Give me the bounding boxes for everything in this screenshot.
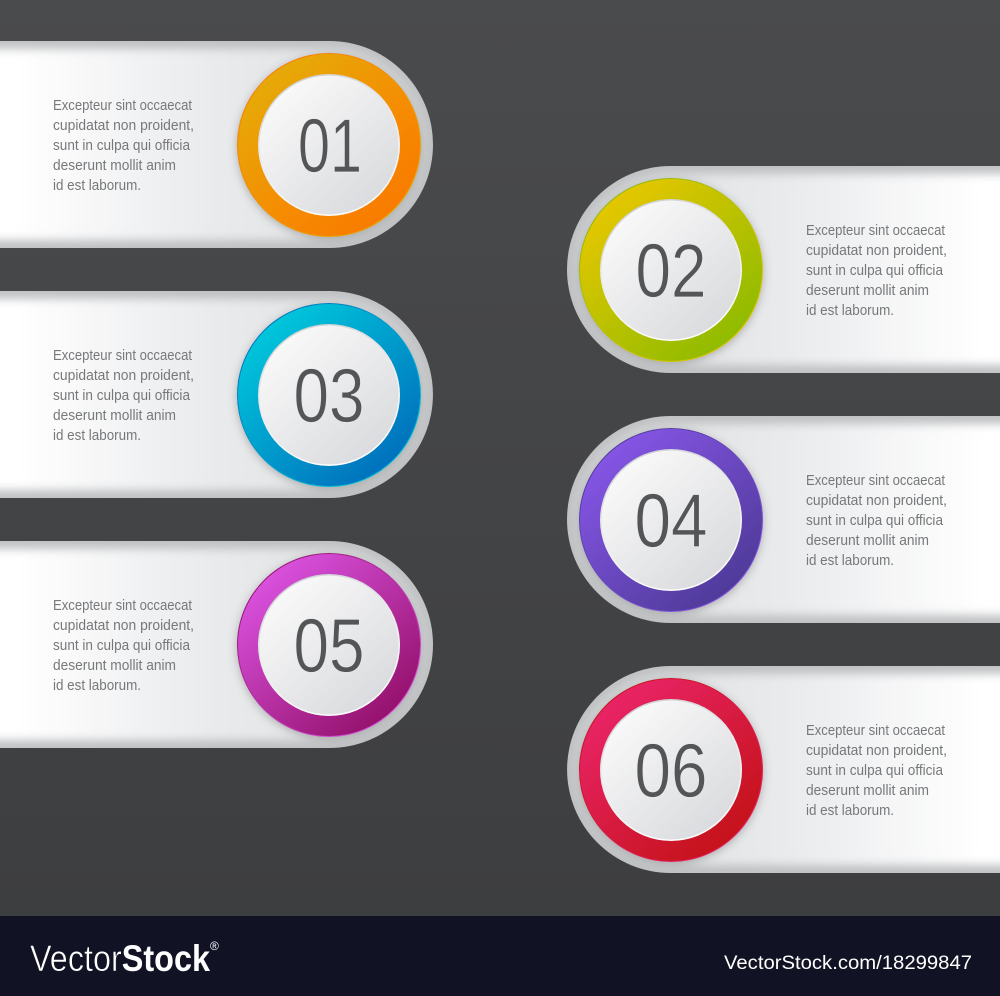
text block 03: deserunt mollit anim [53,407,176,424]
text block 05: sunt in culpa qui officia [53,637,191,654]
text block 06 [806,722,947,819]
text block 02: cupidatat non proident, [806,242,947,259]
text block 05: Excepteur sint occaecat [53,597,193,614]
badge 02 [579,178,763,362]
panel: step 05 [0,541,433,748]
text block 03: id est laborum. [53,427,141,444]
text block 02: sunt in culpa qui officia [806,262,944,279]
text block 04: cupidatat non proident, [806,492,947,509]
text block 01: deserunt mollit anim [53,157,176,174]
text block 03: cupidatat non proident, [53,367,194,384]
text block 04 [806,472,947,569]
text block 01: cupidatat non proident, [53,117,194,134]
panel: step 03 [0,291,433,498]
badge 02: 02 [636,229,706,314]
text block 06: id est laborum. [806,802,894,819]
text block 02: deserunt mollit anim [806,282,929,299]
text block 03: Excepteur sint occaecat [53,347,193,364]
text block 02 [806,222,947,319]
badge 04: 04 [634,479,708,564]
text block 01: Excepteur sint occaecat [53,97,193,114]
text block 04: sunt in culpa qui officia [806,512,944,529]
badge 06: 06 [634,729,708,814]
footer bar [0,916,1000,996]
text block 05 [53,597,194,694]
panel: step 06 [567,666,1000,873]
text block 06: cupidatat non proident, [806,742,947,759]
footer logo: VectorStock [30,938,210,979]
text block 06: sunt in culpa qui officia [806,762,944,779]
text block 02: id est laborum. [806,302,894,319]
badge 05: 05 [294,604,364,689]
panel: step 02 [567,166,1000,373]
badge 01 [237,53,421,237]
text block 01 [53,97,194,194]
text block 06: deserunt mollit anim [806,782,929,799]
badge 04 [579,428,763,612]
badge 03: 03 [294,354,364,439]
panel: step 01 [0,41,433,248]
text block 05: cupidatat non proident, [53,617,194,634]
text block 04: id est laborum. [806,552,894,569]
text block 03 [53,347,194,444]
badge 03 [237,303,421,487]
badge 06 [579,678,763,862]
text block 01: id est laborum. [53,177,141,194]
text block 05: deserunt mollit anim [53,657,176,674]
text block 06: Excepteur sint occaecat [806,722,946,739]
panel: step 04 [567,416,1000,623]
registered mark: ® [210,939,219,953]
badge 01: 01 [298,104,362,189]
text block 01: sunt in culpa qui officia [53,137,191,154]
badge 05 [237,553,421,737]
footer image id: VectorStock.com/18299847 [724,953,972,974]
text block 04: deserunt mollit anim [806,532,929,549]
text block 04: Excepteur sint occaecat [806,472,946,489]
text block 03: sunt in culpa qui officia [53,387,191,404]
text block 02: Excepteur sint occaecat [806,222,946,239]
text block 05: id est laborum. [53,677,141,694]
